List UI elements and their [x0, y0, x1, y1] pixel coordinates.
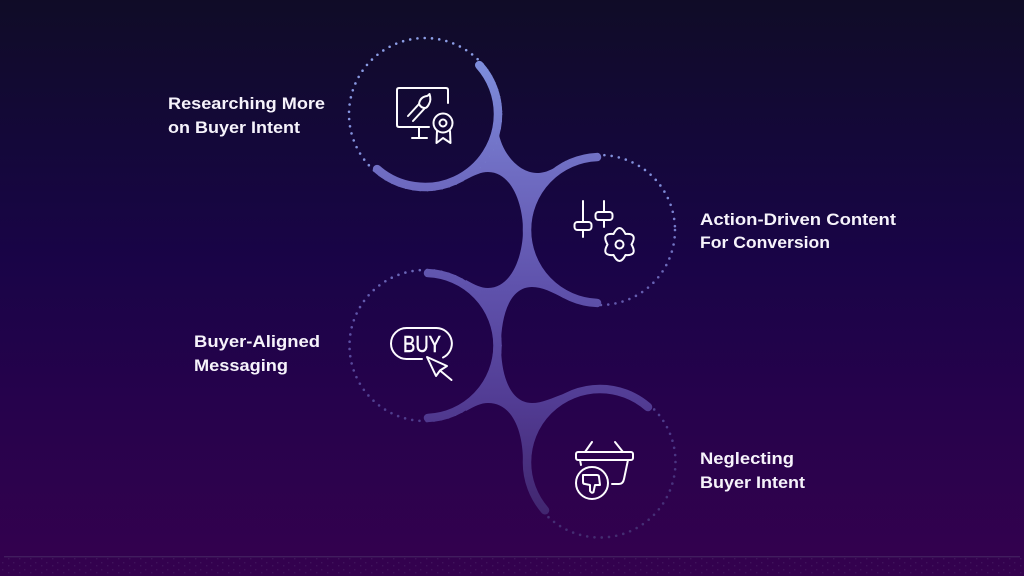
- junction: lower: [425, 346, 600, 462]
- arc: circle 2: [527, 157, 597, 303]
- label: Buyer-Aligned Messaging: Buyer-Aligned: [194, 333, 320, 351]
- arc: circle 1: [377, 65, 498, 187]
- icon: basket with thumbs down: [576, 442, 633, 499]
- label: Action-Driven Content For Conversion: For Conversion: [700, 234, 830, 252]
- arc: circle 3: [428, 273, 498, 418]
- ribbon arcs: [377, 65, 648, 510]
- dotted circle rings: [349, 38, 676, 538]
- junction: middle: [425, 230, 600, 346]
- label: Researching More on Buyer Intent: on Buyer Intent: [168, 119, 301, 137]
- icon: buy button with cursor: [391, 328, 452, 380]
- icon: buy button with cursor: BUY: [403, 331, 441, 357]
- label: Action-Driven Content For Conversion: [700, 211, 897, 252]
- label: Researching More on Buyer Intent: Researching More: [168, 95, 325, 113]
- label: Action-Driven Content For Conversion: Action-Driven Content: [700, 211, 897, 229]
- label: Researching More on Buyer Intent: [168, 95, 325, 137]
- label: Buyer-Aligned Messaging: Messaging: [194, 357, 288, 375]
- label: Neglecting Buyer Intent: [700, 450, 806, 492]
- junction: top: [425, 114, 600, 230]
- connected ribbon junctions: [425, 114, 600, 462]
- arc: circle 4: [527, 389, 648, 510]
- circle interiors: [356, 45, 669, 531]
- label: Buyer-Aligned Messaging: [194, 333, 320, 375]
- icon: sliders and gear: [574, 201, 634, 261]
- icon: monitor with brush and award: [397, 88, 452, 143]
- label: Neglecting Buyer Intent: Buyer Intent: [700, 474, 806, 492]
- bottom noise strip: [0, 556, 1024, 576]
- label: Neglecting Buyer Intent: Neglecting: [700, 450, 794, 468]
